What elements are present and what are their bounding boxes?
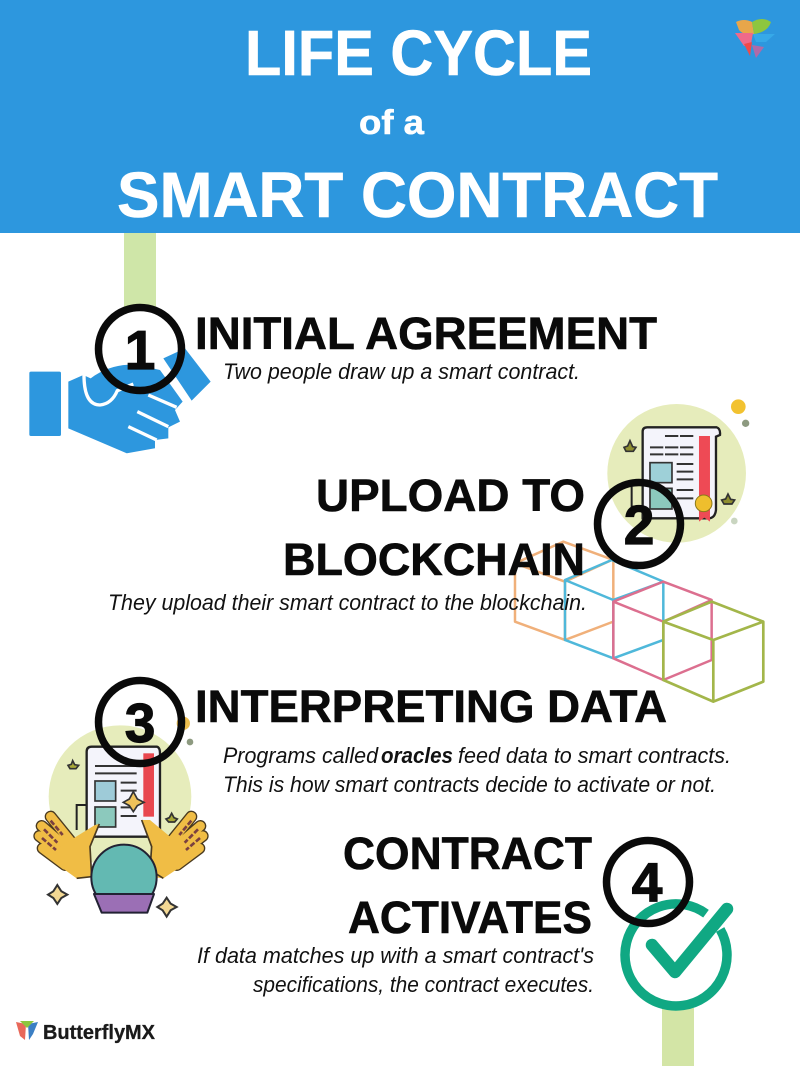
step 4 description: If data matches up with a smart contract's — [197, 943, 594, 968]
cube: olive — [663, 602, 763, 702]
step 3 description: This is how smart contracts decide to activate or not. — [223, 772, 716, 797]
number badge 4 — [606, 840, 690, 924]
number badge 2: 2 — [624, 494, 654, 556]
connector bar: bottom — [662, 1008, 694, 1066]
step 1 heading: INITIAL AGREEMENT — [195, 308, 657, 359]
icon: contract certificate — [607, 399, 749, 543]
hand: right — [142, 817, 203, 878]
step 2 description: They upload their smart contract to the blockchain. — [108, 590, 587, 615]
icon: handshake — [29, 348, 211, 453]
step 3 description: oracles — [381, 743, 453, 768]
number badge 3 — [98, 680, 182, 764]
hand: left — [39, 817, 99, 878]
cube: blue — [565, 560, 663, 658]
header banner — [0, 0, 800, 233]
title: SMART CONTRACT — [117, 159, 718, 231]
number badge 4: 4 — [632, 851, 663, 913]
step 4 heading — [343, 828, 592, 943]
title: of a — [359, 104, 425, 142]
step 3 description — [223, 743, 731, 797]
icon: top butterfly logo — [735, 19, 775, 58]
icon: crystal ball with contract — [39, 717, 203, 917]
icon: check mark — [625, 904, 727, 1006]
cube: orange — [515, 542, 613, 640]
step 3 description: Programs called — [223, 743, 379, 768]
step 1 description: Two people draw up a smart contract. — [223, 359, 580, 384]
step 3 heading: INTERPRETING DATA — [195, 681, 667, 732]
title: LIFE CYCLE — [245, 17, 592, 89]
number badge 1: 1 — [125, 319, 155, 381]
number badge 2 — [598, 482, 680, 566]
step 2 heading: UPLOAD TO — [316, 470, 585, 521]
title — [117, 17, 718, 231]
number badge 1 — [98, 308, 182, 390]
step 4 heading: ACTIVATES — [348, 892, 592, 943]
footer logo: ButterflyMX — [43, 1022, 156, 1044]
step 4 heading: CONTRACT — [343, 828, 592, 879]
step 2 heading: BLOCKCHAIN — [283, 534, 585, 585]
step 4 description — [197, 943, 594, 997]
icon: blockchain cubes — [515, 542, 763, 702]
connector bar: top — [124, 233, 156, 307]
cube: pink — [613, 582, 712, 680]
step 3 description: feed data to smart contracts. — [458, 743, 731, 768]
number badge 3: 3 — [125, 692, 155, 754]
step 4 description: specifications, the contract executes. — [253, 972, 594, 997]
step 2 heading — [283, 470, 585, 585]
